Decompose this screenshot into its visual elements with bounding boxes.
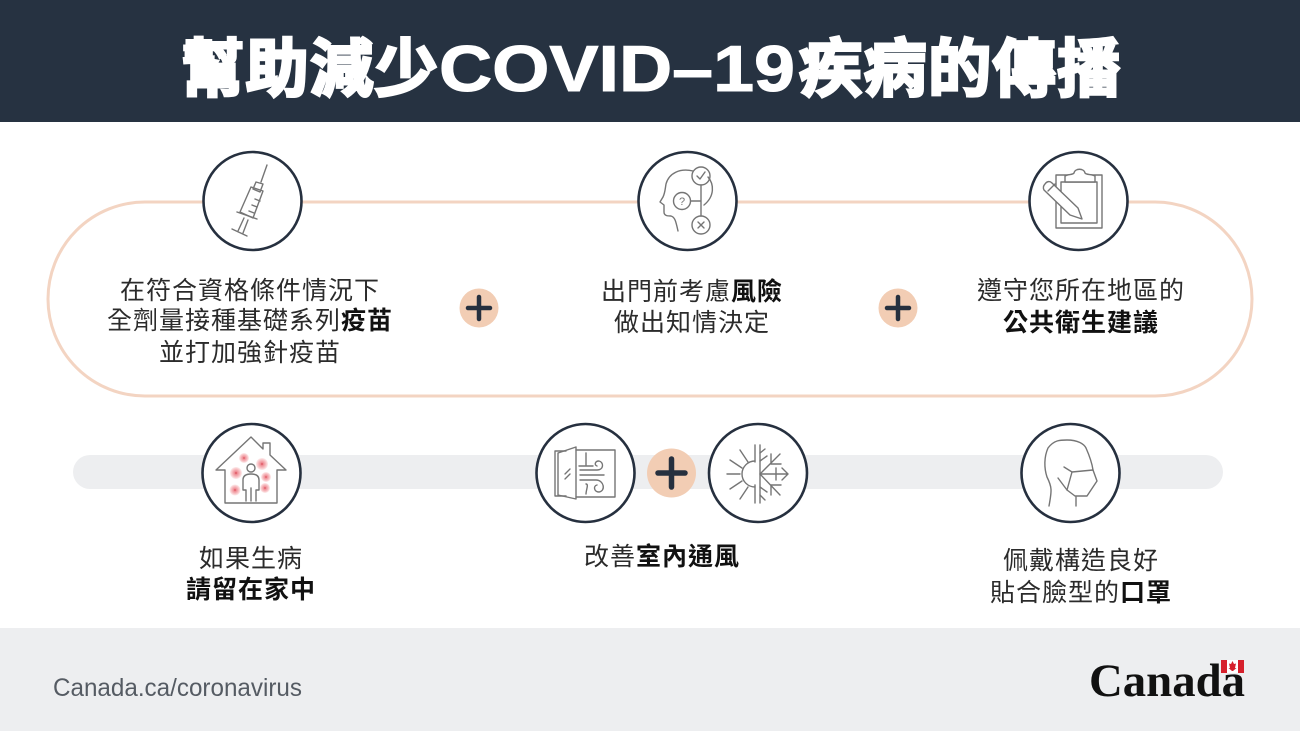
icon: clipboard and pencil — [1030, 152, 1128, 250]
plus icon 2 — [878, 288, 918, 328]
text: vaccines — [107, 277, 393, 367]
title banner — [0, 0, 1300, 122]
footer — [0, 628, 1300, 731]
icon: syringe — [204, 152, 302, 250]
text: risk: 做出知情決定 — [614, 309, 770, 337]
grey band — [73, 455, 1223, 489]
footer url: Canada.ca/coronavirus — [53, 674, 302, 702]
text: public health advice: 遵守您所在地區的 — [977, 277, 1185, 305]
text: stay home — [186, 545, 316, 604]
icon: open window with airflow — [536, 424, 634, 522]
icon: sun and snowflake — [709, 424, 807, 522]
text: risk: 出門前考慮風險 — [601, 277, 783, 306]
icon: head with decision choices — [638, 152, 736, 250]
plus icon: ventilation — [647, 448, 696, 498]
text: vaccines: 全劑量接種基礎系列疫苗 — [107, 307, 393, 335]
text: vaccines: 在符合資格條件情況下 — [120, 277, 380, 305]
icon: head with decision choices: ? — [679, 196, 685, 208]
Canada wordmark: Canada — [1089, 655, 1245, 707]
text: ventilation: 改善室內通風 — [584, 542, 740, 571]
icon: Canadian flag — [1221, 660, 1244, 673]
text: public health advice: 公共衛生建議 — [1003, 309, 1159, 337]
peach rounded outline panel — [48, 202, 1252, 396]
text: stay home: 請留在家中 — [186, 576, 316, 604]
text: mask: 佩戴構造良好 — [1003, 547, 1159, 575]
icon: house with sick person — [202, 424, 300, 522]
text: mask — [990, 547, 1172, 607]
title: 疾病的傳播 — [799, 19, 1122, 110]
text: stay home: 如果生病 — [199, 545, 303, 573]
plus icon 1 — [460, 288, 498, 328]
icon: person wearing a face mask — [1022, 424, 1120, 522]
text: public health advice — [977, 277, 1185, 337]
text: mask: 貼合臉型的口罩 — [990, 579, 1172, 607]
text: risk — [601, 277, 783, 337]
title: 幫助減少 — [181, 19, 439, 110]
title: COVID–19 — [439, 32, 795, 105]
text: vaccines: 並打加強針疫苗 — [159, 339, 341, 367]
title — [181, 19, 1122, 110]
